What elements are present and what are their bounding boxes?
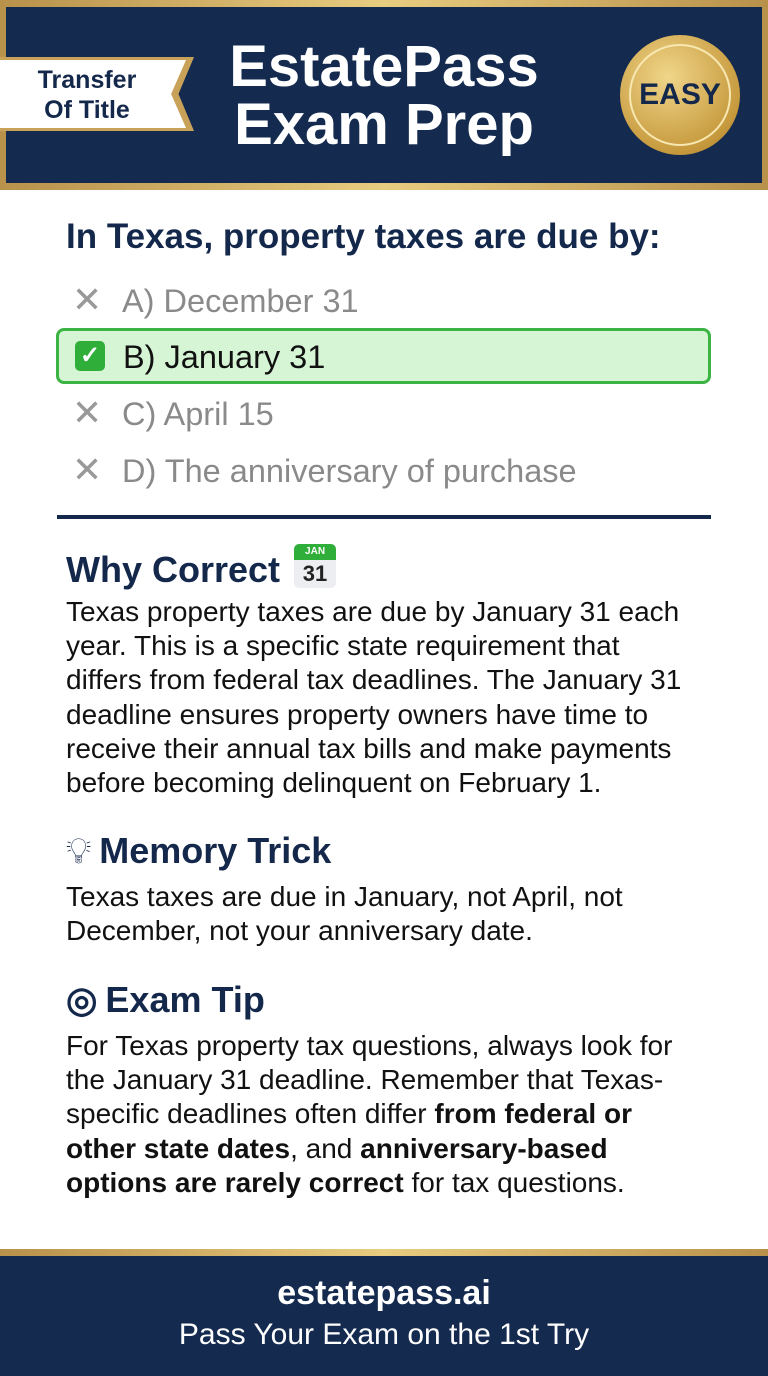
ribbon: topic: Transfer [38,66,136,94]
text: why correct: Texas property taxes are due by January 31 each [66,596,679,627]
option D: ✕ [72,449,102,490]
heading: memory trick: 💡︎Memory Trick [66,830,331,871]
option D: D) The anniversary of purchase [122,453,577,489]
text: memory trick: December, not your anniversary date. [66,915,533,946]
text: exam tip: For Texas property tax questions, always look for [66,1030,672,1061]
option C [72,392,274,433]
text: why correct: receive their annual tax bills and make payments [66,733,671,764]
heading: why correct: JAN [305,546,325,557]
question: In Texas, property taxes are due by: [66,217,661,256]
badge: easy: EASY [639,78,721,111]
footer: estatepass.ai [277,1274,491,1312]
heading: exam tip: ◎Exam Tip [66,979,265,1020]
footer: Pass Your Exam on the 1st Try [179,1318,589,1351]
text: exam tip: the January 31 deadline. Remember that Texas- [66,1064,663,1095]
text: exam tip: options are rarely correct for tax questions. [66,1167,625,1198]
text: why correct: deadline ensures property owners have time to [66,699,648,730]
footer [0,1249,768,1376]
ribbon: topic [0,57,194,131]
option B correct [56,328,711,384]
text: why correct [66,596,681,798]
title: EstatePass [229,34,539,99]
option C: C) April 15 [122,396,274,432]
text: why correct: year. This is a specific state requirement that [66,630,620,661]
option C: ✕ [72,392,102,433]
heading: why correct: Why Correct [66,549,280,590]
text: why correct: differs from federal tax deadlines. The January 31 [66,664,681,695]
title: Exam Prep [234,92,534,157]
text: exam tip [66,1030,672,1198]
text: exam tip: other state dates, and anniversary-based [66,1133,608,1164]
option B correct: ✓ [80,342,100,369]
option A: ✕ [72,279,102,320]
header [0,0,768,190]
option A: A) December 31 [122,283,359,319]
ribbon: topic: Of Title [44,96,130,124]
text: exam tip: specific deadlines often differ from federal or [66,1098,632,1129]
badge: easy [620,35,740,155]
option B correct: B) January 31 [123,339,325,375]
text: memory trick [66,881,623,946]
text: memory trick: Texas taxes are due in January, not April, not [66,881,623,912]
text: why correct: before becoming delinquent on February 1. [66,767,601,798]
title [229,34,539,157]
heading: why correct: 31 [303,561,327,586]
